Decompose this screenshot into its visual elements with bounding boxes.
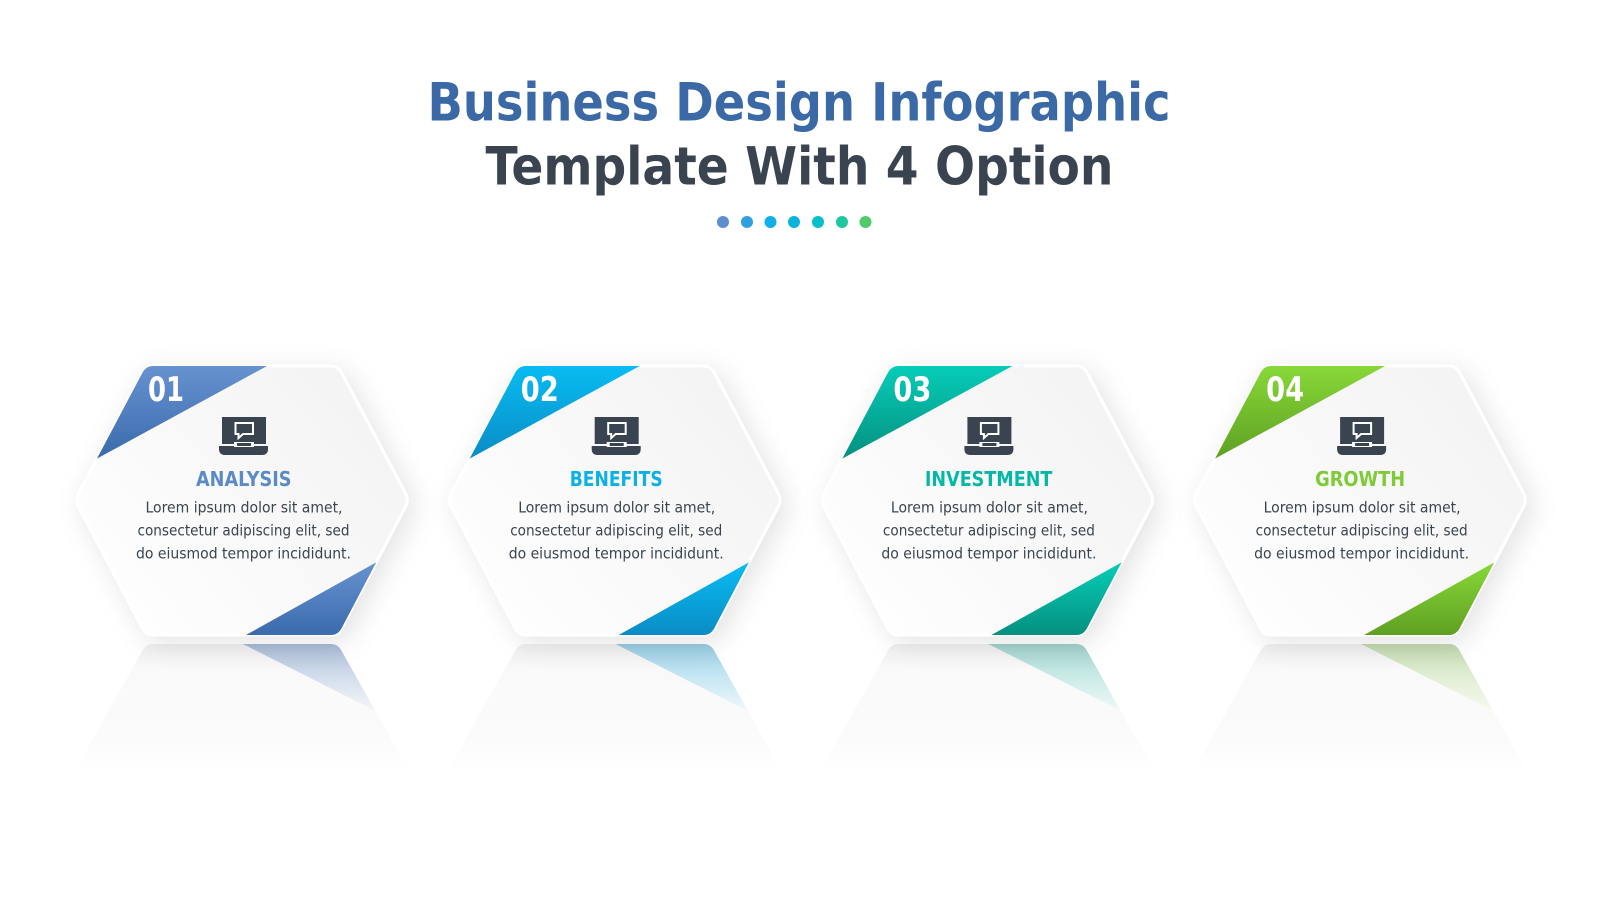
body text: consectetur adipiscing elit, sed <box>138 522 350 540</box>
bottom corner ribbon <box>618 562 749 635</box>
title line 2: Template With 4 Option <box>486 136 1114 198</box>
number: 02 <box>521 370 559 410</box>
body text: do eiusmod tempor incididunt. <box>136 544 351 562</box>
panel: 04 growth <box>1196 364 1536 710</box>
body text <box>1254 498 1469 562</box>
number: 03 <box>893 370 931 410</box>
body text: Lorem ipsum dolor sit amet, <box>518 498 715 516</box>
body text: do eiusmod tempor incididunt. <box>881 544 1096 562</box>
reflection <box>135 644 375 710</box>
reflection <box>508 644 748 711</box>
bottom corner ribbon <box>1364 562 1494 635</box>
panel: 03 investment <box>824 364 1164 710</box>
bottom corner ribbon <box>246 562 376 635</box>
body text <box>509 498 724 562</box>
body text: Lorem ipsum dolor sit amet, <box>891 498 1088 516</box>
hexagon card <box>77 366 407 635</box>
top corner ribbon <box>470 366 640 459</box>
hexagon card <box>822 366 1153 635</box>
reflection <box>1254 644 1493 710</box>
panel: 01 analysis <box>78 364 418 710</box>
bottom corner ribbon <box>992 562 1122 635</box>
top corner ribbon <box>842 366 1012 459</box>
body text: consectetur adipiscing elit, sed <box>510 522 722 540</box>
decorative dots row <box>717 216 872 228</box>
heading: BENEFITS <box>570 467 663 491</box>
title line 1: Business Design Infographic <box>428 72 1170 134</box>
body text: consectetur adipiscing elit, sed <box>883 522 1095 540</box>
title <box>428 72 1170 198</box>
number: 01 <box>148 370 184 410</box>
panel: 02 benefits <box>451 364 790 711</box>
body text: Lorem ipsum dolor sit amet, <box>146 498 342 516</box>
hexagon card <box>450 366 780 635</box>
body text: consectetur adipiscing elit, sed <box>1256 522 1468 540</box>
icon: laptop with speech bubble <box>1337 417 1386 455</box>
heading: INVESTMENT <box>925 467 1052 491</box>
body text <box>136 498 351 562</box>
body text <box>881 498 1096 562</box>
body text: do eiusmod tempor incididunt. <box>509 544 724 562</box>
hexagon card <box>1195 366 1525 635</box>
heading: ANALYSIS <box>196 467 292 491</box>
number: 04 <box>1266 370 1304 410</box>
body text: do eiusmod tempor incididunt. <box>1254 544 1469 562</box>
heading: GROWTH <box>1315 467 1405 491</box>
reflection <box>881 644 1120 710</box>
top corner ribbon <box>1214 366 1385 459</box>
icon: laptop with speech bubble <box>964 417 1013 455</box>
icon: laptop with speech bubble <box>592 417 641 455</box>
icon: laptop with speech bubble <box>219 417 268 455</box>
top corner ribbon <box>96 366 267 459</box>
body text: Lorem ipsum dolor sit amet, <box>1264 498 1461 516</box>
